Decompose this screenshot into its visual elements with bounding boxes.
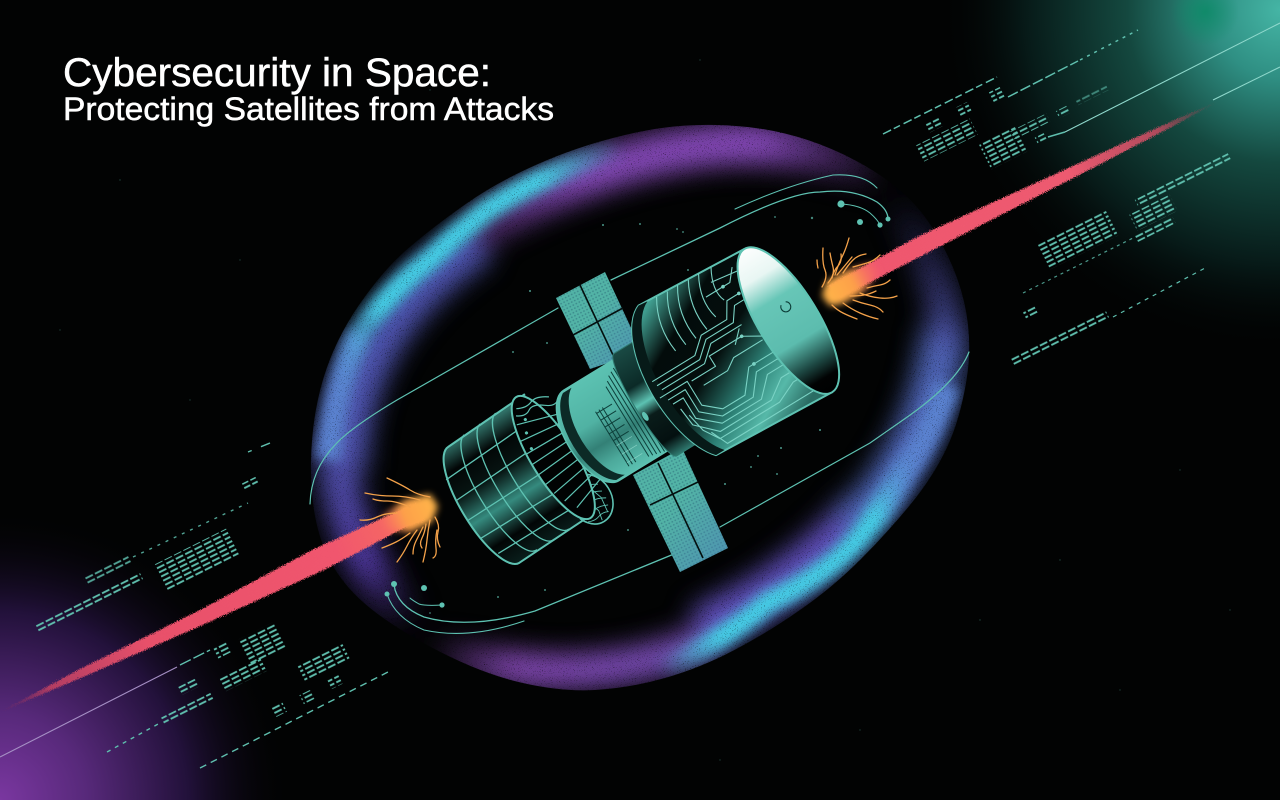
data stream: upper right [883,23,1280,169]
title line 2: Protecting Satellites from Attacks [63,91,554,127]
data stream: middle right [1010,153,1231,366]
satellite: collar [605,341,697,461]
satellite [418,227,858,590]
attack beam: left [0,503,425,712]
orbit trail: upper [310,175,890,504]
orbit dots: lower [384,581,445,608]
solar panel: lower [633,448,728,572]
attack beam: right [828,103,1215,298]
circuit traces [614,246,825,461]
impact burst: left [360,478,440,562]
satellite: neck [542,352,682,494]
orbit trail: lower [384,352,969,633]
satellite: main cylinder [609,227,858,473]
energy shield [328,144,948,672]
data stream: lower left lower group [0,622,388,768]
impact burst: right [817,238,897,319]
solar panel: upper [556,272,640,369]
title line 1: Cybersecurity in Space: [63,51,491,95]
title [63,51,554,127]
satellite: rear drum [426,378,626,582]
data stream: lower left upper group [34,443,270,633]
cylinder end face [719,233,858,408]
orbit dots: upper [837,200,890,228]
